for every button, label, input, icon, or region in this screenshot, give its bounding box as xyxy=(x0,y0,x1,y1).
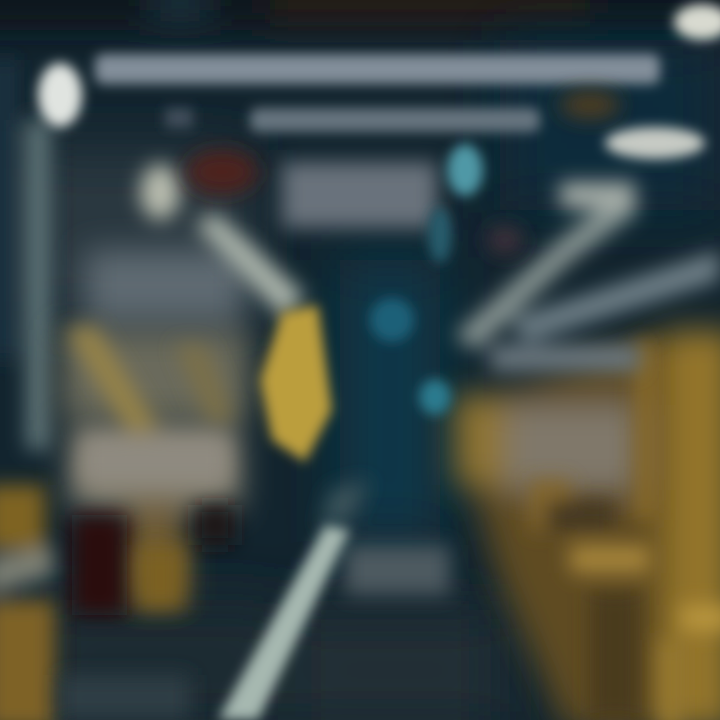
panel: right shelving highlights xyxy=(530,340,720,720)
icon: yellow arm segment xyxy=(260,305,332,462)
icon: red-brown accent xyxy=(186,150,258,194)
panel: right light racks xyxy=(455,182,720,371)
floor stripe xyxy=(218,525,350,720)
title xyxy=(95,54,660,132)
panel: centre grey block xyxy=(282,162,437,228)
icon: dark red barrel xyxy=(72,505,235,615)
panel: floor xyxy=(60,480,450,720)
panel: left goods cluster xyxy=(60,250,250,600)
icon: robot arm xyxy=(140,164,305,320)
panel: top dark band xyxy=(0,0,720,30)
icon: tan crate diagonals xyxy=(65,325,235,485)
icon: brown accent top right xyxy=(487,91,620,254)
panel: right yellow shelving xyxy=(450,330,720,720)
panel: bottom-left yellow crate xyxy=(0,485,185,720)
panel: left column xyxy=(0,60,50,450)
icon: teal lights xyxy=(370,144,483,415)
icon: white ceiling lights xyxy=(38,4,720,159)
